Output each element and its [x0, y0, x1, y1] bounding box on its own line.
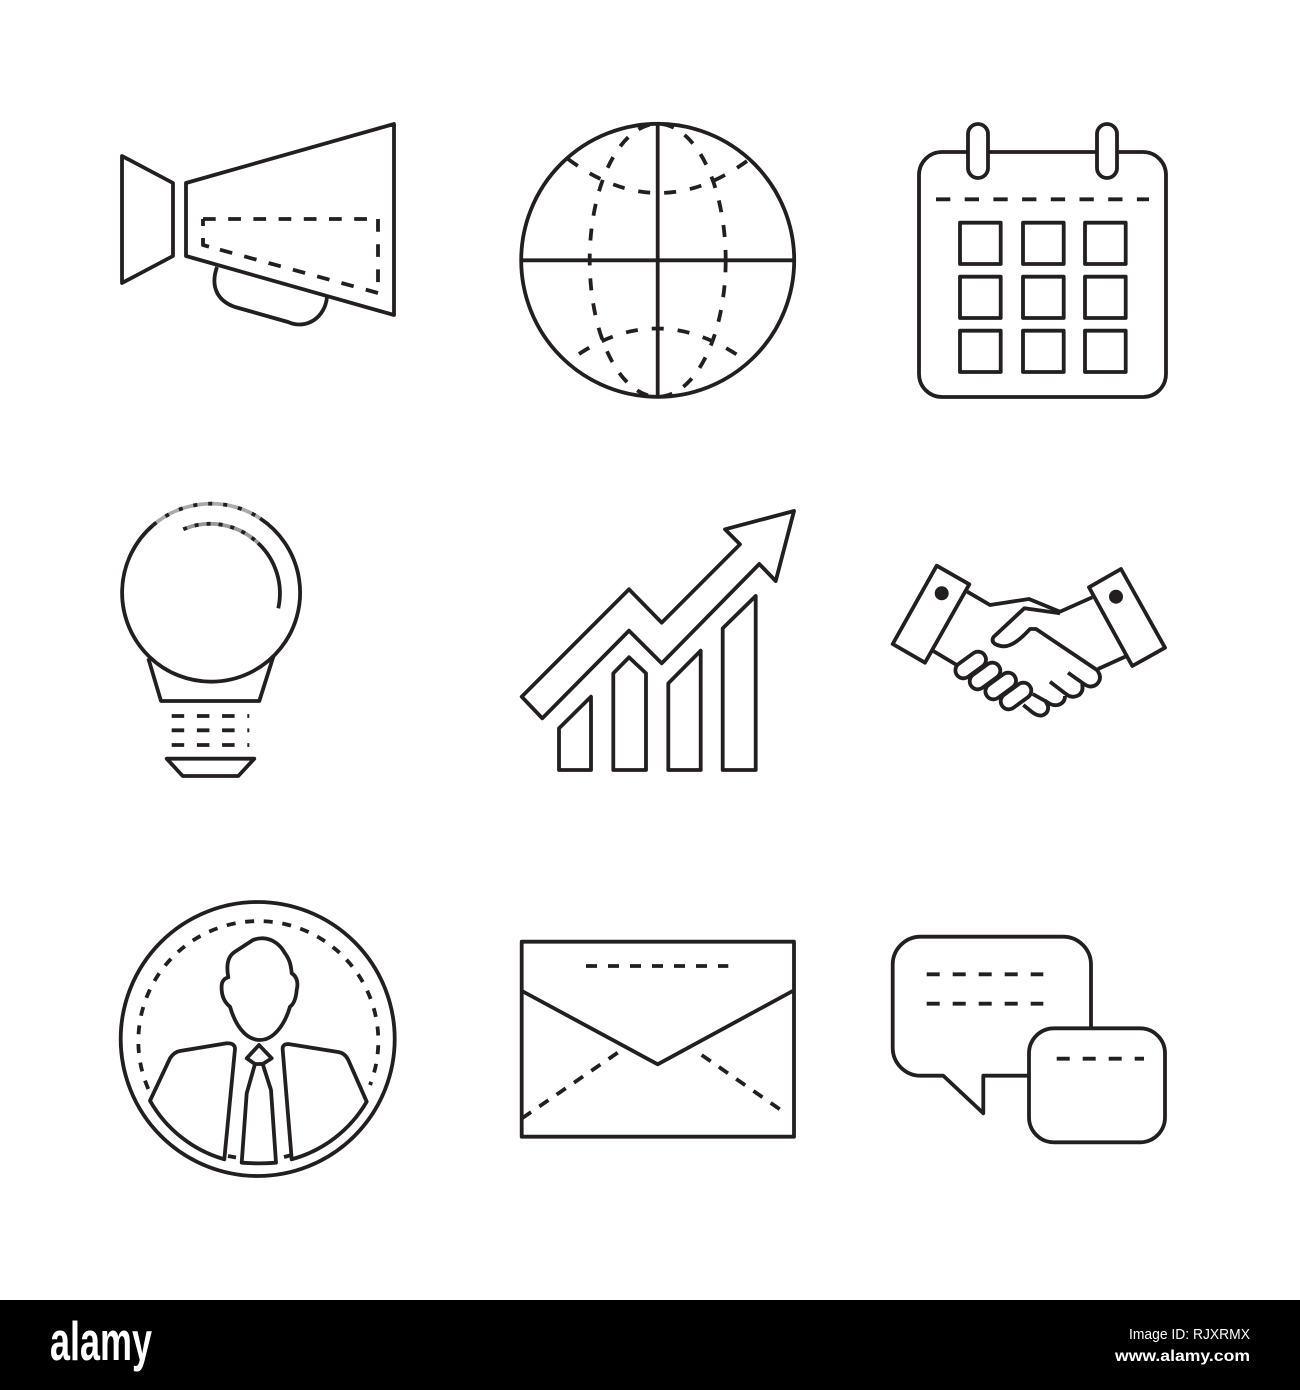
image id: Image ID: RJXRMX	[1129, 1326, 1250, 1343]
icon: growth chart with arrow	[522, 511, 794, 770]
icon: speech bubbles	[893, 937, 1165, 1142]
icon: globe	[521, 124, 794, 397]
footer bar	[0, 1300, 1300, 1390]
icon: megaphone	[122, 124, 394, 324]
icon: calendar	[919, 124, 1166, 397]
icon: envelope	[522, 942, 794, 1137]
icon: businessman avatar	[121, 902, 395, 1176]
website: www.alamy.com	[1114, 1348, 1250, 1365]
icon: handshake	[893, 566, 1165, 716]
icon: light bulb	[122, 504, 300, 776]
logo: alamy: alamy	[50, 1310, 152, 1372]
